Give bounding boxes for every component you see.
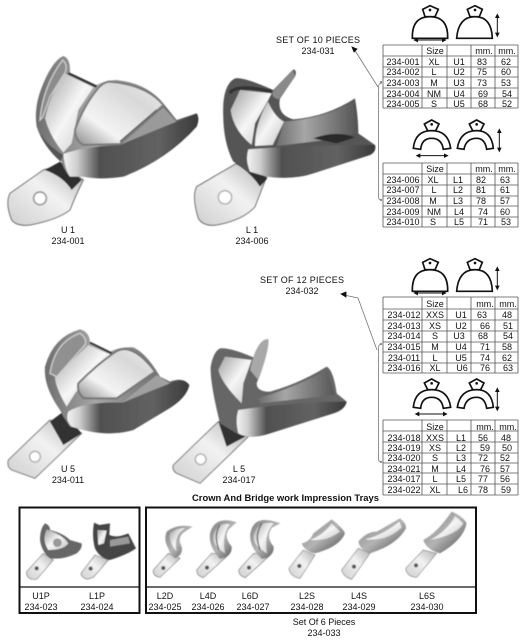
table: upper trays set of 12: 62 xyxy=(502,353,512,363)
tray photo: L6S xyxy=(406,512,467,577)
diagram: lower tray dimensions 2 xyxy=(413,379,500,416)
table: upper trays set of 12: U1 xyxy=(455,310,467,320)
callout: set of 10 pieces: SET OF 10 PIECES xyxy=(276,35,360,45)
tray photo: U1 xyxy=(8,56,198,225)
table: lower trays 234-006 to 234-010: S xyxy=(430,217,436,227)
table: lower trays set of 12: 234-022 xyxy=(387,485,421,495)
label: L6S: L6S xyxy=(419,591,435,601)
tray photo: L4D xyxy=(197,520,237,578)
table: lower trays 234-006 to 234-010: XL xyxy=(427,175,439,185)
table: lower trays 234-006 to 234-010: 234-007 xyxy=(386,185,420,195)
table: upper trays 234-001 to 234-005: 53 xyxy=(501,78,511,88)
table: upper trays set of 12: 234-011 xyxy=(388,353,420,363)
table: upper trays 234-001 to 234-005: U2 xyxy=(453,67,465,77)
label: U1P: U1P xyxy=(32,591,50,601)
table: lower trays set of 12: XXS xyxy=(426,433,444,443)
label: L6D xyxy=(236,591,270,612)
table: lower trays set of 12: L6 xyxy=(458,485,468,495)
table: upper trays set of 12: U2 xyxy=(455,321,467,331)
table: lower trays set of 12: 76 xyxy=(480,464,490,474)
table: upper trays 234-001 to 234-005: 62 xyxy=(501,57,511,67)
table: lower trays 234-006 to 234-010: M xyxy=(429,196,437,206)
panel: L2D to L6S trays xyxy=(146,508,476,613)
table: upper trays 234-001 to 234-005: S xyxy=(431,99,437,109)
table: upper trays set of 12: XS xyxy=(429,321,441,331)
label: L 5: L 5 xyxy=(233,464,245,474)
table: lower trays 234-006 to 234-010: Size xyxy=(426,164,444,174)
label: U 5: 234-011 xyxy=(52,475,84,485)
label: U 1: U 1 xyxy=(61,225,75,235)
table: lower trays 234-006 to 234-010: mm. xyxy=(475,164,493,174)
table: lower trays set of 12: 234-019 xyxy=(387,443,421,453)
table: lower trays set of 12: 72 xyxy=(478,453,488,463)
table: upper trays 234-001 to 234-005: 60 xyxy=(501,67,511,77)
table: upper trays set of 12: 63 xyxy=(503,363,513,373)
tray photo: L6D xyxy=(239,520,280,578)
table: lower trays 234-006 to 234-010: 53 xyxy=(501,217,511,227)
table: upper trays 234-001 to 234-005: 68 xyxy=(478,99,488,109)
table: lower trays set of 12: 78 xyxy=(478,485,488,495)
table: lower trays 234-006 to 234-010: L5 xyxy=(454,217,464,227)
table: lower trays set of 12: 52 xyxy=(500,453,510,463)
table: lower trays 234-006 to 234-010: 57 xyxy=(500,196,510,206)
table: upper trays 234-001 to 234-005: 234-001 xyxy=(386,57,420,67)
diagram: upper tray dimensions 1 xyxy=(412,6,500,42)
diagram: lower tray dimensions 1 xyxy=(413,120,502,158)
table: lower trays 234-006 to 234-010: 63 xyxy=(500,175,510,185)
table: upper trays set of 12: 234-015 xyxy=(387,342,421,352)
table: upper trays set of 12: U4 xyxy=(455,342,467,352)
table: upper trays 234-001 to 234-005: 234-002 xyxy=(386,67,420,77)
label: L4S xyxy=(342,591,376,612)
tray photo: L2S xyxy=(289,519,345,578)
table: lower trays set of 12: M xyxy=(431,464,439,474)
table: lower trays set of 12: 57 xyxy=(500,464,510,474)
table: upper trays 234-001 to 234-005: U5 xyxy=(453,99,465,109)
table: upper trays set of 12: 68 xyxy=(478,331,488,341)
label: L 5 xyxy=(222,464,256,485)
table: upper trays 234-001 to 234-005: 69 xyxy=(478,89,488,99)
table: upper trays 234-001 to 234-005: Size xyxy=(426,46,444,56)
table: lower trays set of 12: L1 xyxy=(456,433,466,443)
table: upper trays set of 12: U5 xyxy=(455,353,467,363)
table: lower trays 234-006 to 234-010: 78 xyxy=(476,196,486,206)
table: lower trays set of 12 xyxy=(383,420,518,495)
table: lower trays 234-006 to 234-010 xyxy=(383,163,518,227)
table: lower trays set of 12: L3 xyxy=(456,453,466,463)
arrow: set of 10 bracket xyxy=(352,47,382,201)
table: lower trays 234-006 to 234-010: 234-006 xyxy=(386,175,420,185)
table: upper trays set of 12: U6 xyxy=(456,363,468,373)
caption: set of 6 pieces xyxy=(293,617,356,638)
label: L2D xyxy=(148,591,182,612)
table: lower trays 234-006 to 234-010: L2 xyxy=(453,185,463,195)
table: lower trays 234-006 to 234-010: L xyxy=(431,185,437,195)
table: lower trays 234-006 to 234-010: L1 xyxy=(453,175,463,185)
table: upper trays 234-001 to 234-005: U4 xyxy=(453,89,465,99)
label: U1P xyxy=(24,591,58,612)
table: upper trays 234-001 to 234-005: XL xyxy=(428,57,440,67)
label: L1P: L1P xyxy=(89,591,105,601)
table: lower trays 234-006 to 234-010: 234-008 xyxy=(386,196,420,206)
table: upper trays set of 12: 58 xyxy=(502,342,512,352)
table: lower trays set of 12: L5 xyxy=(456,474,466,484)
table: lower trays set of 12: mm. xyxy=(499,422,517,432)
table: lower trays set of 12: L2 xyxy=(456,443,466,453)
label: U 5 xyxy=(52,464,84,485)
table: lower trays set of 12: 56 xyxy=(500,474,510,484)
table: lower trays set of 12: mm. xyxy=(476,422,494,432)
table: upper trays 234-001 to 234-005: 234-004 xyxy=(386,89,420,99)
label: L2S: L2S xyxy=(299,591,315,601)
table: upper trays 234-001 to 234-005: U1 xyxy=(453,57,465,67)
tray photo: L5 xyxy=(173,339,347,483)
table: upper trays set of 12: 63 xyxy=(477,310,487,320)
table: upper trays set of 12: 234-016 xyxy=(387,363,421,373)
tray photo: L2D xyxy=(153,526,193,577)
label: L2D: 234-025 xyxy=(148,602,182,612)
table: lower trays set of 12: 50 xyxy=(502,443,512,453)
label: L 1: 234-006 xyxy=(235,236,269,246)
table: upper trays 234-001 to 234-005: mm. xyxy=(498,46,516,56)
label: L4D: L4D xyxy=(200,591,217,601)
table: upper trays set of 12: 234-013 xyxy=(387,321,421,331)
table: lower trays 234-006 to 234-010: 61 xyxy=(500,185,510,195)
table: lower trays 234-006 to 234-010: NM xyxy=(427,207,441,217)
table: upper trays 234-001 to 234-005: mm. xyxy=(475,46,493,56)
table: lower trays set of 12: L xyxy=(432,474,438,484)
label: L1P xyxy=(80,591,114,612)
tray photo: L1P xyxy=(81,523,136,579)
callout: set of 12 pieces xyxy=(260,275,344,296)
label: L1P: 234-024 xyxy=(80,602,114,612)
table: upper trays 234-001 to 234-005: 234-003 xyxy=(386,78,420,88)
table: upper trays set of 12: 74 xyxy=(480,353,490,363)
table: upper trays set of 12: XL xyxy=(429,363,441,373)
table: upper trays set of 12: S xyxy=(432,331,438,341)
table: lower trays set of 12: 77 xyxy=(478,474,488,484)
callout: set of 10 pieces xyxy=(276,35,360,56)
table: lower trays 234-006 to 234-010: 234-009 xyxy=(386,207,420,217)
table: lower trays set of 12: 59 xyxy=(480,443,490,453)
table: upper trays set of 12: 66 xyxy=(480,321,490,331)
table: upper trays 234-001 to 234-005: 234-005 xyxy=(386,99,420,109)
table: upper trays 234-001 to 234-005: L xyxy=(431,67,437,77)
label: L4S: L4S xyxy=(351,591,367,601)
table: lower trays 234-006 to 234-010: 82 xyxy=(476,175,486,185)
callout: set of 10 pieces: 234-031 xyxy=(301,46,335,56)
label: L6S xyxy=(410,591,444,612)
label: L4D xyxy=(191,591,225,612)
label: L2D: L2D xyxy=(157,591,174,601)
tray photo: L1 xyxy=(195,69,375,225)
table: lower trays 234-006 to 234-010: 74 xyxy=(478,207,488,217)
table: lower trays set of 12: 48 xyxy=(501,433,511,443)
table: upper trays 234-001 to 234-005 xyxy=(383,45,518,109)
table: upper trays set of 12: 234-014 xyxy=(387,331,421,341)
table: lower trays set of 12: XL xyxy=(429,485,441,495)
table: lower trays set of 12: 234-020 xyxy=(387,453,421,463)
table: lower trays 234-006 to 234-010: 60 xyxy=(500,207,510,217)
table: upper trays set of 12: M xyxy=(431,342,439,352)
label: U1P: 234-023 xyxy=(24,602,58,612)
table: upper trays set of 12: XXS xyxy=(426,310,444,320)
table: upper trays set of 12: 234-012 xyxy=(387,310,421,320)
table: upper trays set of 12: 51 xyxy=(503,321,513,331)
table: upper trays set of 12: Size xyxy=(426,299,444,309)
arrow: set of 12 bracket xyxy=(341,292,382,463)
label: L4S: 234-029 xyxy=(342,602,376,612)
label: L6D: L6D xyxy=(242,591,259,601)
panel: U1P and L1P trays xyxy=(19,508,140,613)
label: L4D: 234-026 xyxy=(191,602,225,612)
label: U 1: 234-001 xyxy=(51,236,85,246)
table: upper trays 234-001 to 234-005: U3 xyxy=(453,78,465,88)
table: upper trays 234-001 to 234-005: 83 xyxy=(477,57,487,67)
table: upper trays set of 12: 76 xyxy=(480,363,490,373)
table: lower trays set of 12: Size xyxy=(426,422,444,432)
table: upper trays set of 12: U3 xyxy=(453,331,465,341)
table: lower trays 234-006 to 234-010: 81 xyxy=(476,185,486,195)
table: lower trays set of 12: 234-018 xyxy=(387,433,421,443)
table: upper trays set of 12: mm. xyxy=(476,299,494,309)
table: lower trays set of 12: 234-017 xyxy=(387,474,421,484)
table: lower trays 234-006 to 234-010: 234-010 xyxy=(386,217,420,227)
tray photo: U1P xyxy=(27,523,82,579)
caption: set of 6 pieces: Set Of 6 Pieces xyxy=(293,617,356,627)
table: upper trays set of 12 xyxy=(383,297,518,373)
label: L 1: L 1 xyxy=(246,225,258,235)
table: lower trays 234-006 to 234-010: mm. xyxy=(498,164,516,174)
caption: set of 6 pieces: 234-033 xyxy=(307,628,341,638)
table: lower trays set of 12: XS xyxy=(429,443,441,453)
callout: set of 12 pieces: 234-032 xyxy=(285,286,319,296)
table: upper trays 234-001 to 234-005: 73 xyxy=(477,78,487,88)
table: upper trays set of 12: 54 xyxy=(503,331,513,341)
label: L6S: 234-030 xyxy=(410,602,444,612)
tray photo: U5 xyxy=(8,329,189,478)
label: L 5: 234-017 xyxy=(222,475,256,485)
heading: crown and bridge: Crown And Bridge work Impression Trays xyxy=(192,493,379,503)
diagram: upper tray dimensions 2 xyxy=(412,259,500,295)
callout: set of 12 pieces: SET OF 12 PIECES xyxy=(260,275,344,285)
table: lower trays set of 12: 59 xyxy=(501,485,511,495)
table: upper trays set of 12: 71 xyxy=(480,342,490,352)
label: U 5: U 5 xyxy=(61,464,75,474)
label: L2S: 234-028 xyxy=(290,602,324,612)
table: upper trays 234-001 to 234-005: M xyxy=(430,78,438,88)
table: upper trays 234-001 to 234-005: 52 xyxy=(502,99,512,109)
label: U 1 xyxy=(51,225,85,246)
table: lower trays set of 12: S xyxy=(432,453,438,463)
table: upper trays 234-001 to 234-005: 54 xyxy=(502,89,512,99)
table: lower trays set of 12: 234-021 xyxy=(387,464,421,474)
label: L2S xyxy=(290,591,324,612)
table: lower trays set of 12: 56 xyxy=(478,433,488,443)
table: upper trays set of 12: L xyxy=(432,353,438,363)
table: lower trays set of 12: L4 xyxy=(456,464,466,474)
label: L6D: 234-027 xyxy=(236,602,270,612)
table: upper trays set of 12: mm. xyxy=(499,299,517,309)
tray photo: L4S xyxy=(342,518,406,579)
label: L 1 xyxy=(235,225,269,246)
table: lower trays 234-006 to 234-010: L4 xyxy=(454,207,464,217)
table: lower trays 234-006 to 234-010: L3 xyxy=(453,196,463,206)
table: upper trays set of 12: 48 xyxy=(502,310,512,320)
table: upper trays 234-001 to 234-005: 75 xyxy=(477,67,487,77)
table: lower trays 234-006 to 234-010: 71 xyxy=(478,217,488,227)
table: upper trays 234-001 to 234-005: NM xyxy=(427,89,441,99)
